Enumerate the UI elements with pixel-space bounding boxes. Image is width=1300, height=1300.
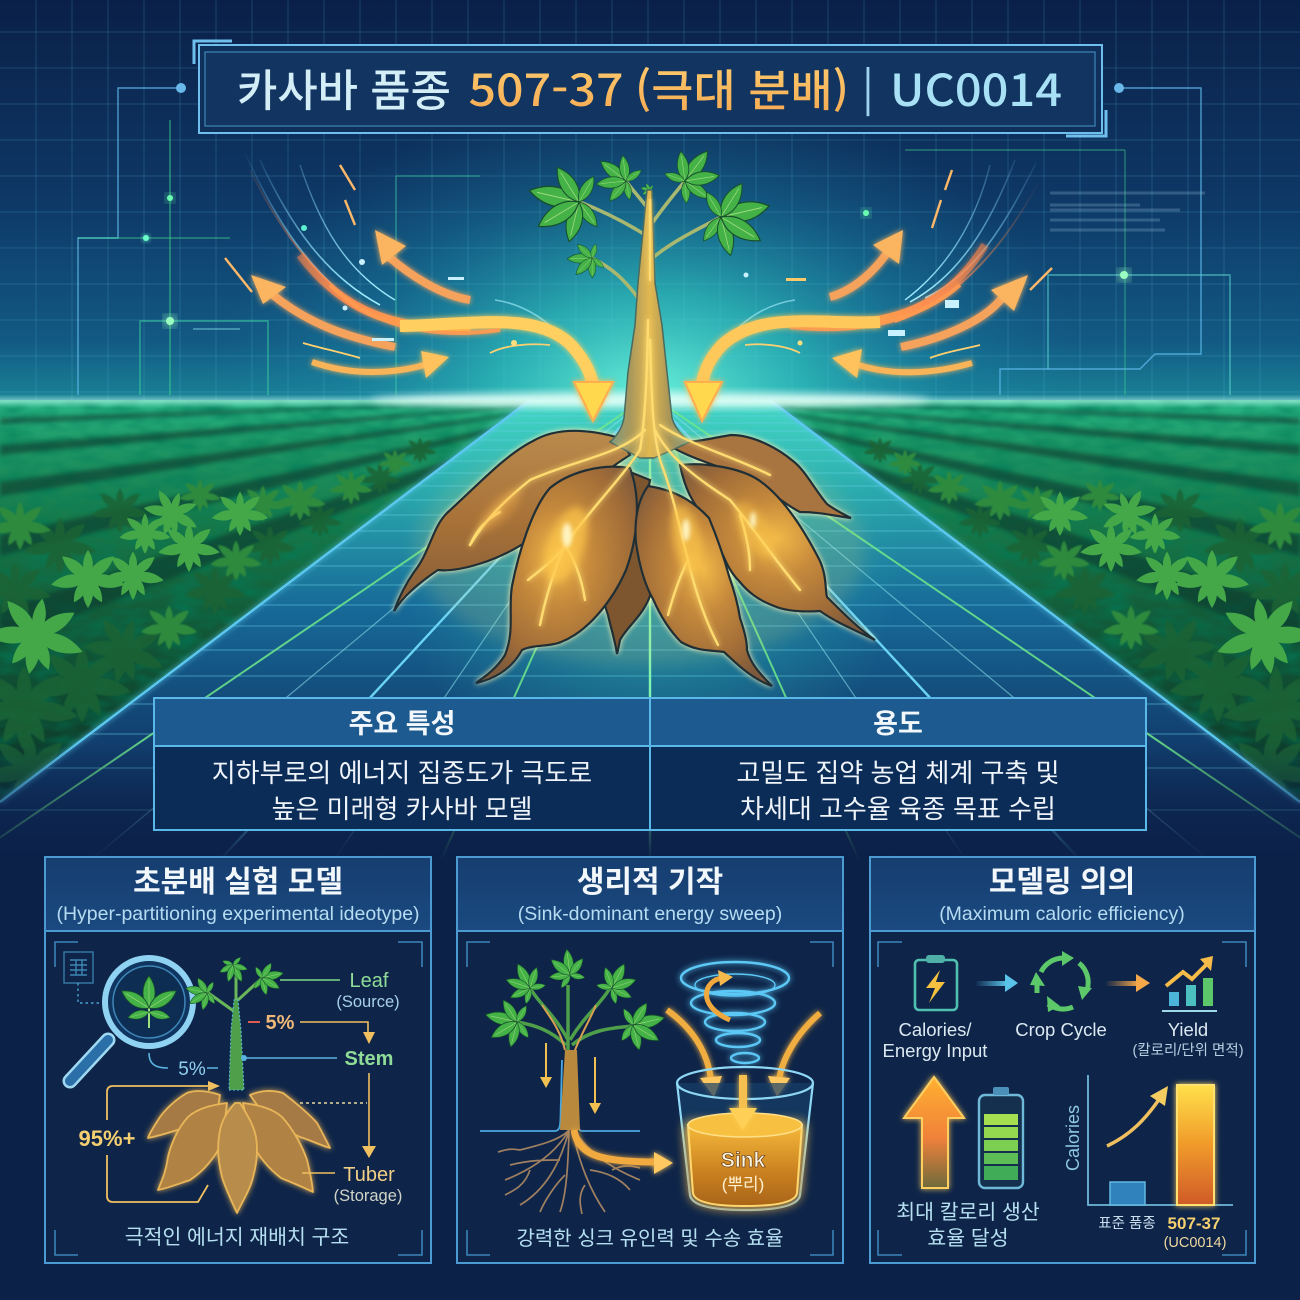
- diagram labels: (Source): [336, 993, 400, 1011]
- table column: key traits: 지하부로의 에너지 집중도가 극도로: [212, 758, 592, 788]
- panel heading: [56, 866, 420, 925]
- icon: clipboard energy: [915, 955, 957, 1010]
- bar chart: 표준 품종: [1098, 1216, 1156, 1232]
- arrow to sink: [574, 1130, 673, 1174]
- flow arrows and callout lines: [107, 980, 376, 1202]
- perspective grid ground: [0, 395, 1300, 860]
- panel heading: (Hyper-partitioning experimental ideotype): [56, 903, 420, 925]
- diagram labels: [79, 970, 402, 1205]
- cup with sink: Sink: [721, 1149, 765, 1172]
- vein hot spots: [473, 483, 783, 589]
- panel heading: 모델링 의의: [989, 866, 1135, 899]
- panel heading: 생리적 기작: [577, 866, 723, 899]
- leaves: [527, 135, 771, 284]
- diagram labels: (Storage): [334, 1187, 402, 1205]
- arrow: cycle to yield: [1105, 974, 1150, 992]
- stem: [610, 190, 690, 458]
- horizon glow line: [0, 392, 1300, 408]
- info table: [154, 698, 1146, 830]
- vein highlights: [562, 512, 756, 547]
- table column: uses: 용도: [873, 709, 923, 739]
- icon: document: [64, 952, 100, 1003]
- panel: modeling significance: [870, 857, 1255, 1263]
- panel caption: 강력한 싱크 유인력 및 수송 효율: [517, 1227, 783, 1250]
- efficiency caption: 최대 칼로리 생산: [896, 1201, 1040, 1224]
- panel heading: [518, 866, 782, 925]
- cup with sink: [677, 1067, 813, 1210]
- diagram labels: 5%: [266, 1012, 295, 1034]
- title text: |: [862, 53, 874, 117]
- flow labels: Crop Cycle: [1015, 1019, 1107, 1040]
- panel: physiological mechanism: [457, 857, 843, 1263]
- table column: key traits: [212, 709, 592, 824]
- glowing veins: [470, 200, 800, 645]
- table column: uses: 차세대 고수율 육종 목표 수립: [740, 794, 1056, 824]
- diagram labels: Stem: [345, 1048, 393, 1070]
- panel caption: 극적인 에너지 재배치 구조: [125, 1226, 349, 1249]
- ground base: [0, 400, 1300, 1300]
- title banner: [194, 41, 1106, 136]
- panel: hyper-partitioning model: [45, 857, 431, 1263]
- bar chart: Calories: [1063, 1105, 1083, 1171]
- flow labels: Calories/: [898, 1019, 972, 1040]
- flow labels: [883, 1019, 1244, 1061]
- panel heading: [939, 866, 1185, 925]
- title text: 507-37: [468, 55, 624, 119]
- diagram labels: Tuber: [343, 1164, 395, 1186]
- background sky with grid: [0, 0, 1300, 402]
- mini tubers: [148, 1091, 330, 1213]
- table column: key traits: 높은 미래형 카사바 모델: [272, 794, 532, 824]
- arrow: input to cycle: [975, 974, 1018, 992]
- bar chart: (UC0014): [1164, 1235, 1226, 1251]
- panel heading: (Maximum caloric efficiency): [939, 903, 1185, 925]
- swirl arrows into cup: [667, 970, 820, 1097]
- crop field left: [0, 396, 640, 807]
- mini plant: [185, 953, 284, 1090]
- circuit lines right: [863, 83, 1230, 395]
- flow labels: (칼로리/단위 면적): [1132, 1042, 1244, 1059]
- energy flow arrows right: [685, 160, 1052, 421]
- energy flow arrows left: [225, 153, 613, 421]
- icon: yield chart: [1162, 956, 1217, 1011]
- title text: [237, 53, 1062, 119]
- table column: uses: 고밀도 집약 농업 체계 구축 및: [736, 758, 1060, 788]
- flow labels: Yield: [1168, 1019, 1208, 1040]
- field edge glow lines: [0, 400, 1300, 802]
- flow labels: Energy Input: [883, 1040, 987, 1061]
- circuit lines left: [78, 83, 480, 395]
- tornado: [681, 962, 789, 1063]
- fade to dark bottom: [0, 740, 1300, 860]
- bar chart: [1063, 1075, 1233, 1251]
- plant glow halo: [415, 435, 865, 665]
- table column: key traits: 주요 특성: [349, 709, 455, 739]
- cup with sink: (뿌리): [722, 1175, 764, 1194]
- icon: magnifier with leaf: [70, 958, 193, 1081]
- title text: 카사바 품종: [237, 55, 451, 119]
- sap flow arrows: [540, 1005, 601, 1114]
- bar chart: 507-37: [1168, 1214, 1220, 1233]
- efficiency caption: 효율 달성: [927, 1227, 1009, 1250]
- plant with roots: [480, 943, 666, 1214]
- crop field right: [660, 396, 1300, 807]
- diagram labels: 5%: [178, 1059, 206, 1080]
- diagram labels: 95%+: [79, 1126, 135, 1151]
- panel heading: (Sink-dominant energy sweep): [518, 903, 782, 925]
- table column: uses: [736, 709, 1060, 824]
- title text: UC0014: [890, 55, 1062, 119]
- efficiency caption: [896, 1201, 1040, 1250]
- title text: (극대 분배): [635, 55, 849, 119]
- icon: battery: [979, 1087, 1023, 1188]
- panel heading: 초분배 실험 모델: [133, 866, 343, 899]
- tubers: [394, 431, 875, 686]
- main cassava plant: [394, 135, 875, 686]
- branches: [580, 181, 721, 298]
- diagram labels: Leaf: [350, 970, 389, 992]
- icon: crop cycle: [1030, 951, 1092, 1012]
- big up arrow: [904, 1077, 964, 1188]
